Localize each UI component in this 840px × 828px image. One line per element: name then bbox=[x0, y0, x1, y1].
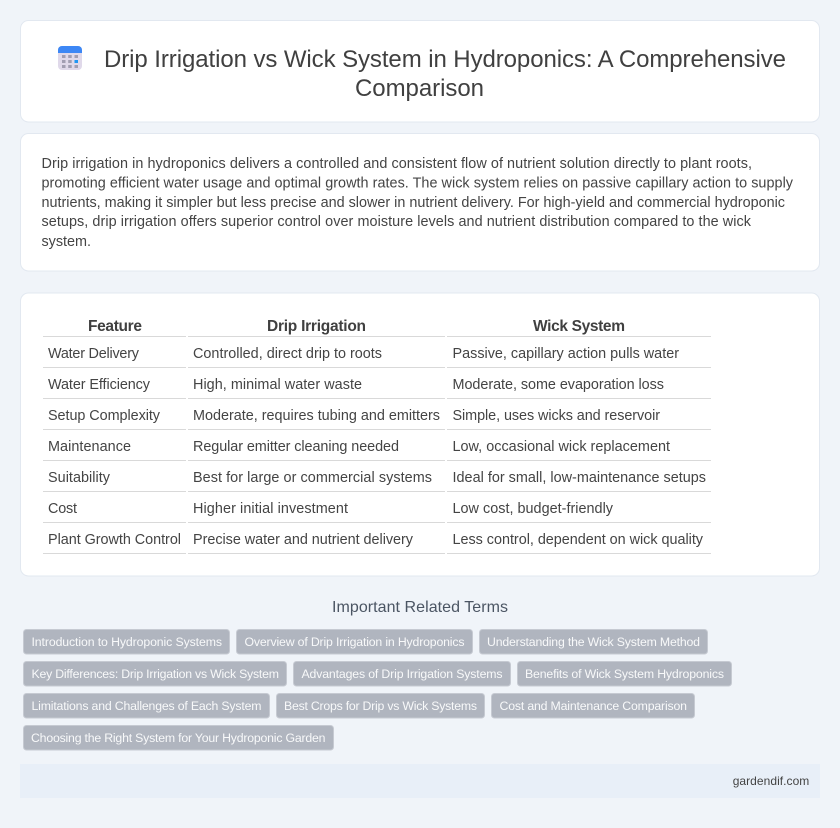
table header row bbox=[88, 318, 625, 335]
table row: suitability: Best for large or commercial systems bbox=[193, 470, 432, 486]
table row: plant growth control bbox=[48, 532, 704, 548]
text block: summary: promoting efficient water usage and optimal growth rates. The wick system relies on passive capillary action to supply bbox=[42, 176, 794, 192]
table row: maintenance: Regular emitter cleaning needed bbox=[193, 439, 399, 455]
chip bbox=[480, 630, 708, 654]
text block: summary: nutrients, making it simpler but less precise and slower in nutrient delivery. For high-yield and commercial hydroponic bbox=[42, 195, 785, 211]
table row: cost: Cost bbox=[48, 501, 77, 517]
title bbox=[104, 46, 786, 102]
chip bbox=[294, 662, 510, 686]
heading: important related terms: Important Related Terms bbox=[332, 599, 508, 616]
chip: Overview of Drip Irrigation in Hydroponics bbox=[244, 635, 464, 649]
table row: plant growth control: Less control, dependent on wick quality bbox=[452, 532, 704, 548]
table row: maintenance: Low, occasional wick replacement bbox=[452, 439, 670, 455]
chip bbox=[24, 726, 334, 750]
table row: suitability: Suitability bbox=[48, 470, 111, 486]
chip bbox=[492, 694, 694, 718]
table row: setup complexity bbox=[48, 408, 660, 424]
text block: summary: Drip irrigation in hydroponics delivers a controlled and consistent flow of nutrient solution directly to plant roots, bbox=[42, 156, 752, 172]
table row: suitability: Ideal for small, low-maintenance setups bbox=[452, 470, 706, 486]
chip bbox=[24, 630, 230, 654]
table row: setup complexity: Moderate, requires tubing and emitters bbox=[193, 408, 440, 424]
table row: plant growth control: Plant Growth Control bbox=[48, 532, 181, 548]
panel: related term chips bbox=[24, 630, 732, 750]
footer source text: gardendif.com bbox=[733, 774, 809, 788]
chip: Introduction to Hydroponic Systems bbox=[32, 635, 222, 649]
table row: setup complexity: Setup Complexity bbox=[48, 408, 161, 424]
text block: summary: setups, drip irrigation offers superior control over moisture levels and nutrient distribution compared to the wick bbox=[42, 214, 752, 230]
title: Comparison bbox=[355, 75, 484, 102]
panel: summary paragraph bbox=[20, 134, 820, 271]
table row: maintenance bbox=[48, 439, 670, 455]
chip: Limitations and Challenges of Each System bbox=[32, 699, 262, 713]
table row: plant growth control: Precise water and nutrient delivery bbox=[193, 532, 414, 548]
text block: summary: system. bbox=[42, 234, 91, 250]
table row: setup complexity: Simple, uses wicks and reservoir bbox=[452, 408, 660, 424]
table row: water efficiency bbox=[48, 377, 664, 393]
table header row: Drip Irrigation bbox=[267, 318, 366, 335]
chip bbox=[276, 694, 484, 718]
table row: water delivery: Controlled, direct drip to roots bbox=[193, 346, 382, 362]
chip bbox=[24, 694, 270, 718]
chip: Best Crops for Drip vs Wick Systems bbox=[284, 699, 477, 713]
chip: Key Differences: Drip Irrigation vs Wick System bbox=[32, 667, 279, 681]
chip bbox=[24, 662, 286, 686]
table row: maintenance: Maintenance bbox=[48, 439, 131, 455]
table row: water delivery: Water Delivery bbox=[48, 346, 140, 362]
table row: water delivery bbox=[48, 346, 679, 362]
table header row: Feature bbox=[88, 318, 142, 335]
title: Drip Irrigation vs Wick System in Hydroponics: A Comprehensive bbox=[104, 46, 786, 73]
table row: cost: Low cost, budget-friendly bbox=[452, 501, 614, 517]
chip: Advantages of Drip Irrigation Systems bbox=[302, 667, 502, 681]
chip: Cost and Maintenance Comparison bbox=[500, 699, 687, 713]
text block: summary bbox=[42, 156, 794, 250]
table header row: Wick System bbox=[533, 318, 625, 335]
table row: cost: Higher initial investment bbox=[193, 501, 348, 517]
table row: water delivery: Passive, capillary action pulls water bbox=[452, 346, 679, 362]
chip: Understanding the Wick System Method bbox=[487, 635, 700, 649]
chip: Benefits of Wick System Hydroponics bbox=[525, 667, 724, 681]
footer bar bbox=[20, 764, 820, 798]
chip bbox=[236, 630, 472, 654]
icon: calendar grid bbox=[58, 46, 82, 70]
table row: water efficiency: Water Efficiency bbox=[48, 377, 151, 393]
panel: title header bbox=[20, 20, 820, 122]
table row: suitability bbox=[48, 470, 706, 486]
table row: water efficiency: Moderate, some evaporation loss bbox=[452, 377, 664, 393]
table row: cost bbox=[48, 501, 614, 517]
chip: Choosing the Right System for Your Hydroponic Garden bbox=[31, 731, 326, 745]
chip bbox=[518, 662, 732, 686]
table row: water efficiency: High, minimal water waste bbox=[193, 377, 362, 393]
panel: comparison table bbox=[20, 293, 820, 576]
